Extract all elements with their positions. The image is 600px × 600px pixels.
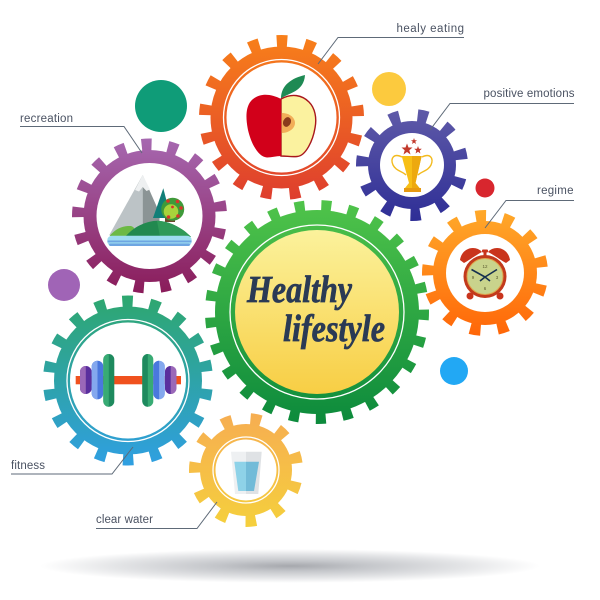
icon: alarm clock: 3 <box>496 275 499 280</box>
icon: alarm clock <box>460 248 510 300</box>
decorative dot: blue <box>440 357 468 385</box>
label: healy eating: healy eating <box>396 23 464 35</box>
ground shadow <box>40 549 540 583</box>
icon: alarm clock: 12 <box>482 264 488 269</box>
icon: alarm clock: 6 <box>484 286 487 291</box>
decorative dot: yellow <box>372 72 406 106</box>
gear: fitness <box>49 302 207 460</box>
title: lifestyle: lifestyle <box>283 308 385 350</box>
label: clear water: clear water <box>96 514 153 526</box>
label: healy eating <box>318 23 464 64</box>
gear: recreation <box>78 145 221 287</box>
title: Healthy: Healthy <box>246 269 352 311</box>
gear: positive emotions <box>362 116 462 214</box>
label: clear water <box>96 502 217 528</box>
label: fitness <box>11 447 133 474</box>
label: regime <box>485 185 574 228</box>
decorative dot: purple <box>48 269 80 301</box>
label: recreation: recreation <box>20 113 73 125</box>
icon: trophy <box>392 138 432 192</box>
gear: clear water <box>195 419 297 521</box>
label: positive emotions: positive emotions <box>484 88 575 100</box>
icon: mountain landscape <box>107 175 192 246</box>
label: regime: regime <box>537 185 574 197</box>
label: positive emotions <box>430 88 575 130</box>
icon: apple <box>246 75 316 158</box>
gear: regime <box>428 216 542 330</box>
label: fitness: fitness <box>11 460 45 472</box>
icon: dumbbell <box>76 354 181 407</box>
gear: healthy eating <box>205 41 358 194</box>
icon: glass of water <box>231 452 262 494</box>
gear: healthy lifestyle (centre) <box>210 206 424 418</box>
decorative dot: teal <box>135 80 187 132</box>
decorative dot: red <box>476 178 494 198</box>
icon: alarm clock: 9 <box>472 275 475 280</box>
label: recreation <box>20 113 142 153</box>
